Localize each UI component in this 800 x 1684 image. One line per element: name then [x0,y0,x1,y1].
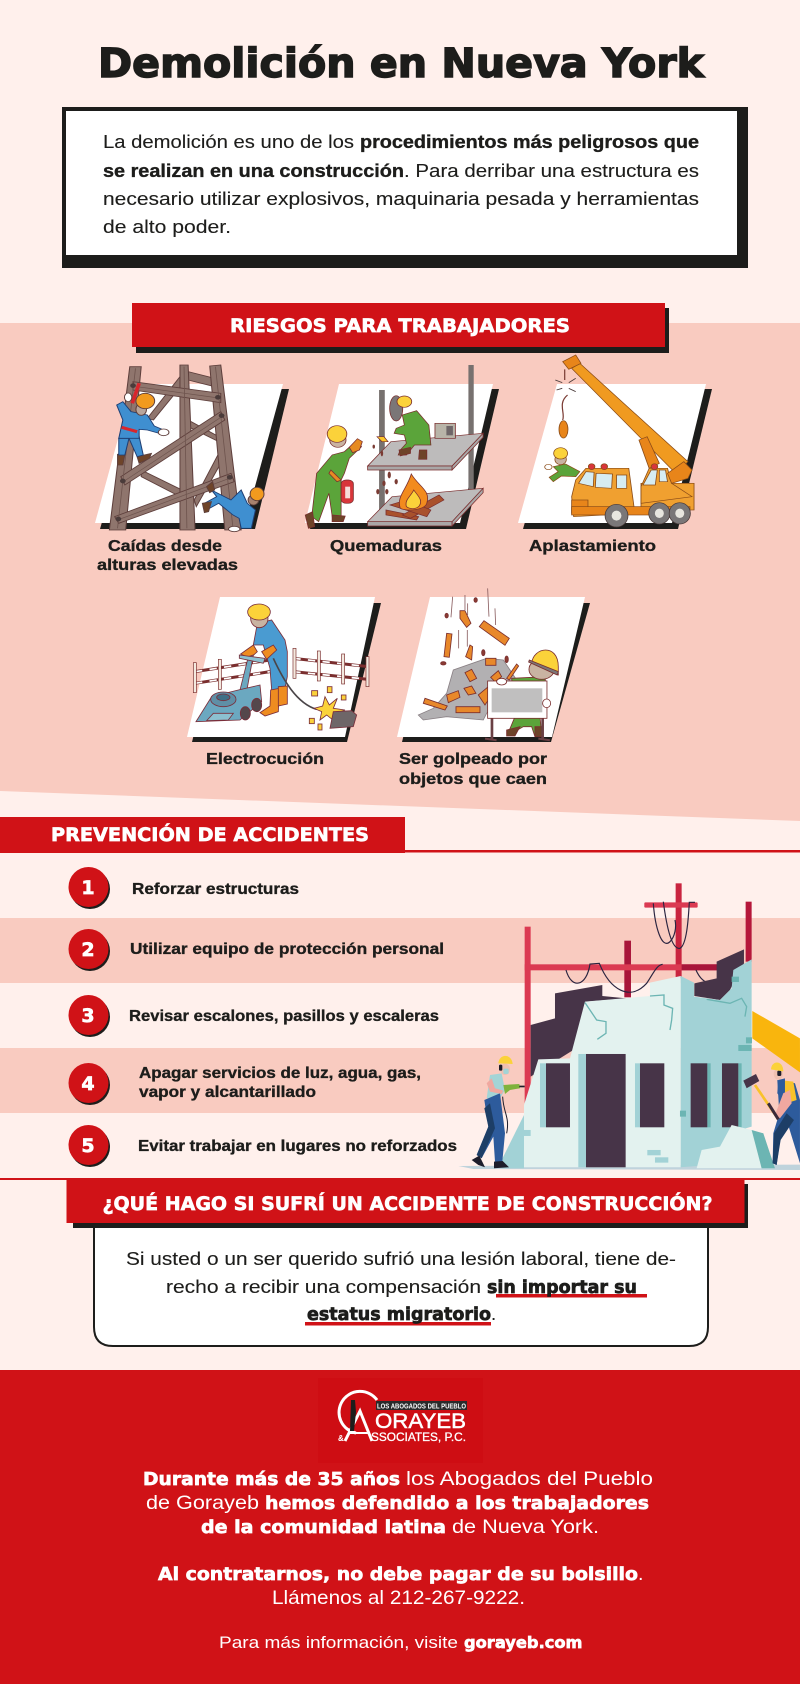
text block: about the firm: hemos defendido a los trabajadores [265,1494,649,1514]
panel: footer [0,1370,800,1684]
text block: compensation: Si usted o un ser querido sufrió una lesión laboral, tiene de- [126,1248,676,1269]
text block: about the firm: Durante más de 35 años [143,1470,400,1490]
icon: worker with sledgehammer [743,1063,800,1165]
text block: call to action [158,1563,643,1609]
text block: compensation [126,1248,676,1326]
text block: about the firm: de Nueva York. [452,1516,599,1538]
text block: intro: procedimientos más peligrosos que [360,131,699,152]
text block: intro: La demolición es uno de los [103,131,354,152]
illustration: demolished building with workers [458,883,800,1170]
text block: about the firm: de Gorayeb [146,1492,259,1514]
text block: website: Para más información, visite [219,1633,458,1652]
list item 1: Reforzar estructuras [132,881,299,898]
logo: Gorayeb & Associates [318,1378,483,1463]
risk tile: quemaduras [305,365,499,555]
risk tile: objetos que caen [397,588,590,788]
icon: crane truck and worker [545,355,694,527]
list item 1 [68,867,299,909]
label: caídas: Caídas desde [108,538,222,555]
text block: intro: se realizan en una construcción [103,160,404,181]
icon: worker with mower and sparks [193,604,369,730]
text block: compensation: sin importar su [487,1278,637,1298]
heading: prevención de accidentes: PREVENCIÓN DE ACCIDENTES [51,822,369,846]
text block: compensation: recho a recibir una compensación [166,1276,481,1297]
text block: intro: de alto poder. [103,216,231,237]
list item 4: Apagar servicios de luz, agua, gas, [139,1065,421,1082]
risk tile: aplastamiento [518,355,712,555]
list item 4: 4 [81,1073,95,1095]
text block: call to action: . [638,1563,643,1585]
text block: about the firm [143,1468,653,1538]
list item 3: 3 [81,1005,95,1027]
icon: welder, fire and scaffold [305,365,483,528]
text block: intro: necesario utilizar explosivos, maquinaria pesada y herramientas [103,188,699,209]
risk tile: electrocución [187,597,381,768]
title: Demolición en Nueva York [98,41,705,87]
label: objetos que caen [399,751,547,788]
list item 5: 5 [81,1135,95,1157]
label: quemaduras: Quemaduras [330,538,442,555]
label: caídas: alturas elevadas [97,557,238,574]
logo: Gorayeb & Associates: LOS ABOGADOS DEL PUEBLO [377,1402,466,1410]
panel: accident callout [94,1200,708,1346]
logo: Gorayeb & Associates: & [338,1434,344,1443]
text block: intro [103,131,699,237]
heading: prevención de accidentes [0,817,800,853]
text block: compensation: estatus migratorio [307,1305,491,1325]
text block: intro: . Para derribar una estructura es [404,160,699,181]
label: objetos que caen: Ser golpeado por [399,751,547,768]
icon: worker with drill [472,1056,525,1168]
heading: qué hago si sufrí un accidente: ¿QUÉ HAGO SI SUFRÍ UN ACCIDENTE DE CONSTRUCCIÓN? [102,1191,712,1215]
list item 2: Utilizar equipo de protección personal [130,941,444,958]
text block: website: gorayeb.com [464,1633,582,1652]
text block: call to action: Al contratarnos, no debe pagar de su bolsillo [158,1565,638,1585]
label: aplastamiento: Aplastamiento [529,538,656,555]
list item 2: 2 [81,939,95,961]
panel: risks background [0,323,800,821]
list item 3: Revisar escalones, pasillos y escaleras [129,1008,439,1025]
list item 5: Evitar trabajar en lugares no reforzados [138,1138,457,1155]
list item 3 [68,995,439,1037]
risk tile: caídas [95,365,289,574]
text block: compensation: . [491,1303,496,1324]
text block: about the firm: los Abogados del Pueblo [406,1468,653,1490]
text block: call to action: Llámenos al 212-267-9222. [272,1587,525,1609]
list item 2 [68,929,444,971]
heading: qué hago si sufrí un accidente [66,1178,748,1228]
label: objetos que caen: objetos que caen [399,771,547,788]
divider line above question [0,1178,800,1180]
panel: prevention row bands [0,918,800,1113]
list item 1: 1 [81,877,95,899]
label: caídas [97,538,238,574]
text block: about the firm: de la comunidad latina [201,1518,446,1538]
logo: Gorayeb & Associates: SSOCIATES, P.C. [371,1432,466,1444]
list item 5 [68,1125,457,1167]
text block: website [219,1633,582,1652]
logo: Gorayeb & Associates: ORAYEB [375,1410,466,1433]
list item 4 [68,1063,421,1105]
list item 4: vapor y alcantarillado [139,1084,316,1101]
icon: worker, falling bricks and rubble [418,588,558,741]
icon: wooden tower with workers [109,365,264,532]
label: electrocución: Electrocución [206,751,324,768]
heading: riesgos para trabajadores [132,303,669,353]
heading: riesgos para trabajadores: RIESGOS PARA TRABAJADORES [230,315,570,337]
panel: intro box [62,107,748,268]
